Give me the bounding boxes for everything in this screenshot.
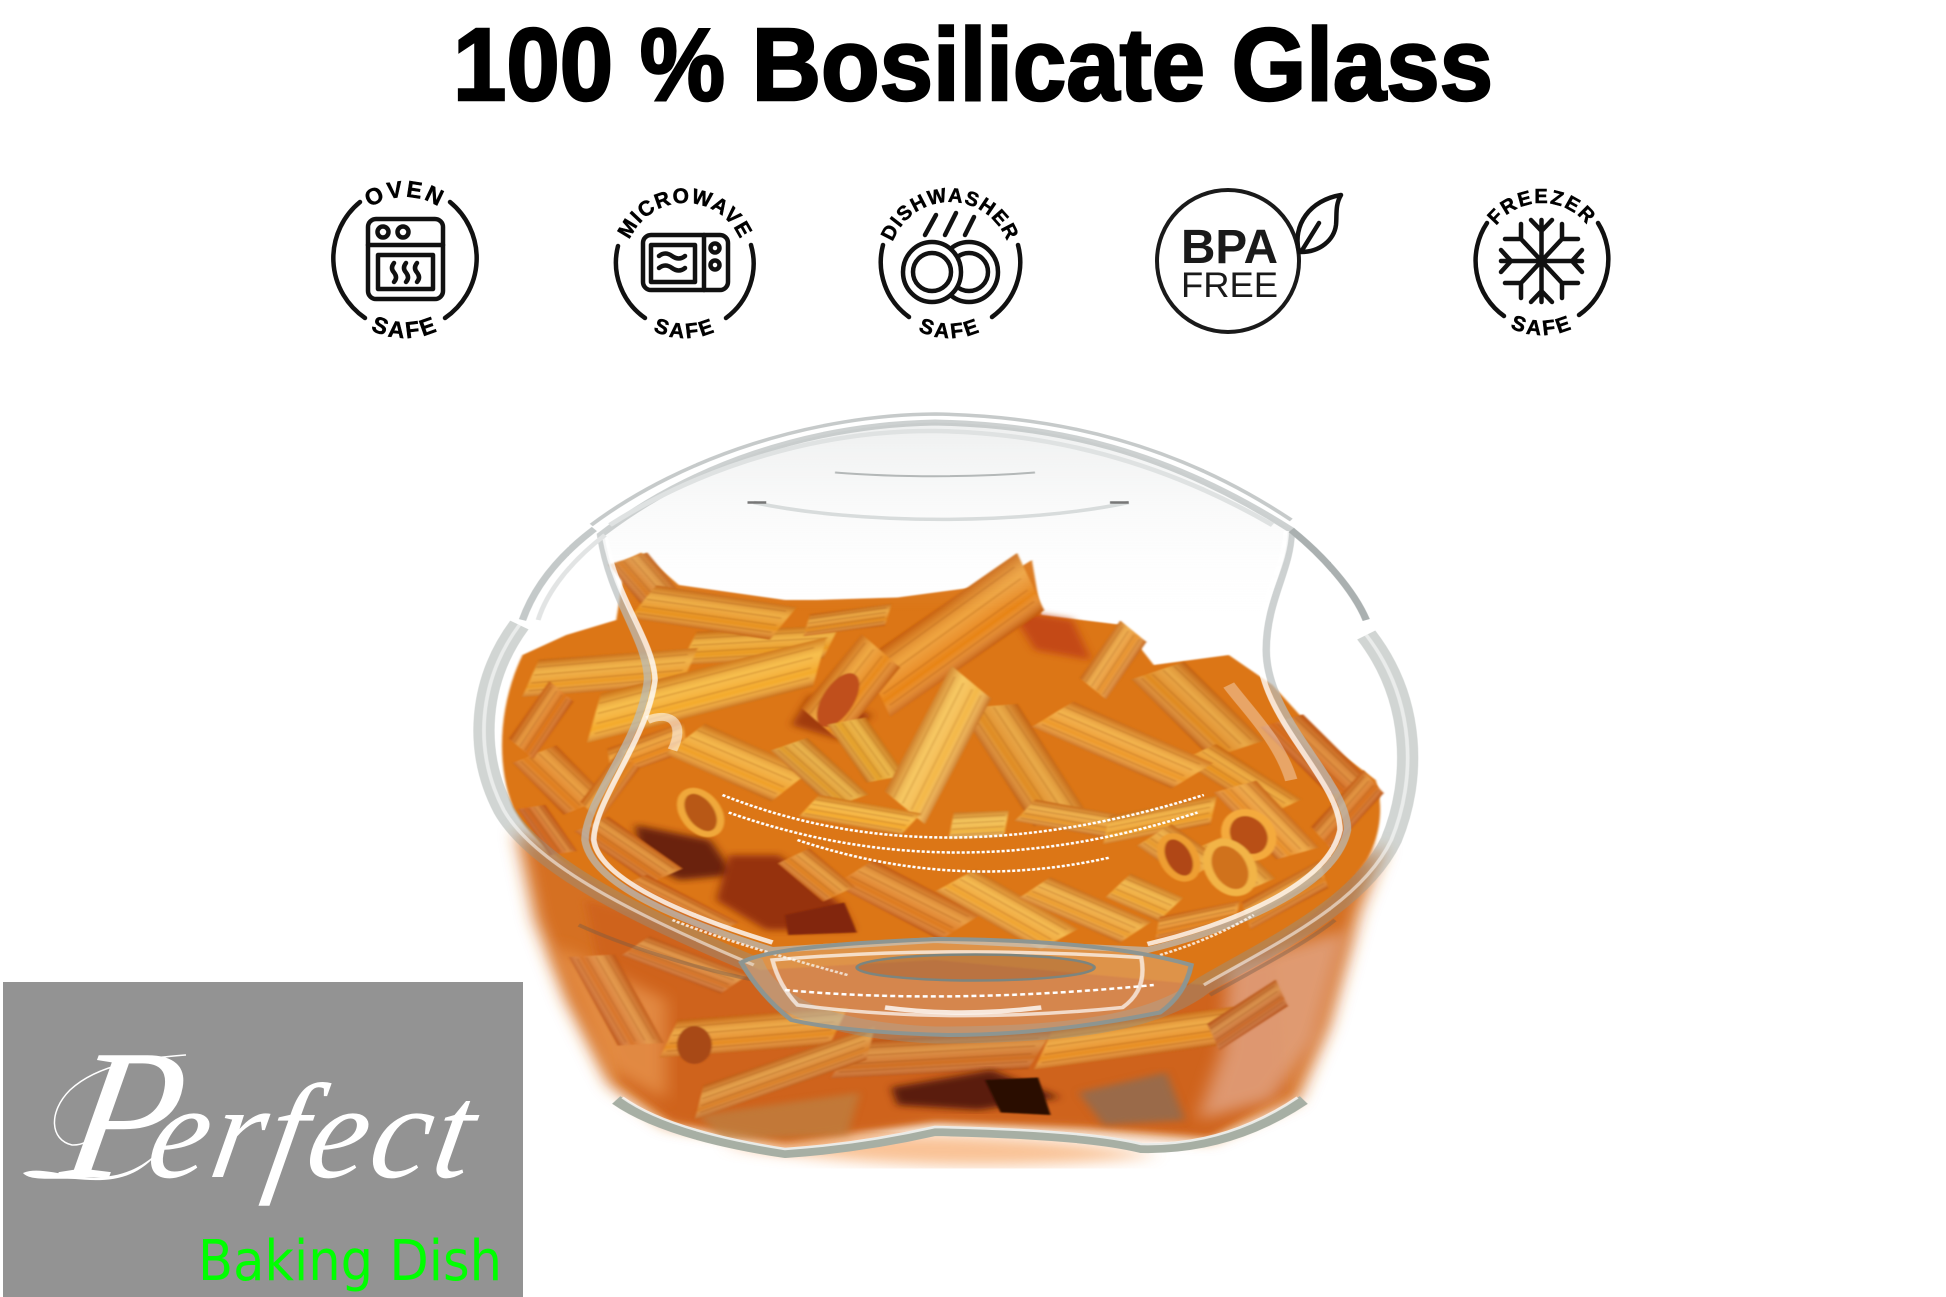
icon: dishwasher safe: SAFE (919, 318, 980, 338)
icon: freezer safe: SAFE (1511, 316, 1572, 336)
icon: microwave safe: SAFE (654, 318, 714, 338)
icon: microwave safe: MICROWAVE (617, 188, 752, 239)
icon: dishwasher safe: DISHWASHER (880, 188, 1018, 241)
icon: BPA free (1157, 190, 1341, 332)
Baking Dish subtitle: Baking Dish (198, 1229, 502, 1294)
icon: freezer safe (1473, 188, 1611, 336)
Perfect script wordmark (23, 1011, 498, 1218)
icon: oven safe (331, 180, 479, 338)
icon: oven safe: SAFE (372, 316, 437, 338)
icon: dishwasher safe (878, 188, 1023, 338)
icon: oven safe: OVEN (366, 180, 444, 206)
glass handle (741, 939, 1191, 1035)
icon: BPA free: BPA (1181, 221, 1278, 274)
panel: Perfect Baking Dish (3, 982, 523, 1297)
Perfect script wordmark: erfect (138, 1058, 490, 1207)
icon: microwave safe (614, 188, 756, 338)
Perfect script wordmark: P (50, 1011, 201, 1218)
icon: BPA free: FREE (1181, 266, 1278, 305)
bowl lower wall with pasta (516, 830, 1385, 1145)
pasta mass (502, 546, 1391, 985)
icon: freezer safe: FREEZER (1486, 188, 1594, 226)
lid reflections (672, 795, 1254, 975)
glass lid (522, 414, 1366, 950)
baking dish with pasta (484, 414, 1408, 1165)
glass bowl rim (484, 625, 1408, 1035)
glass bowl base (616, 1098, 1304, 1153)
title: 100 % Bosilicate Glass (453, 7, 1493, 122)
glow under dish (722, 1135, 1160, 1165)
